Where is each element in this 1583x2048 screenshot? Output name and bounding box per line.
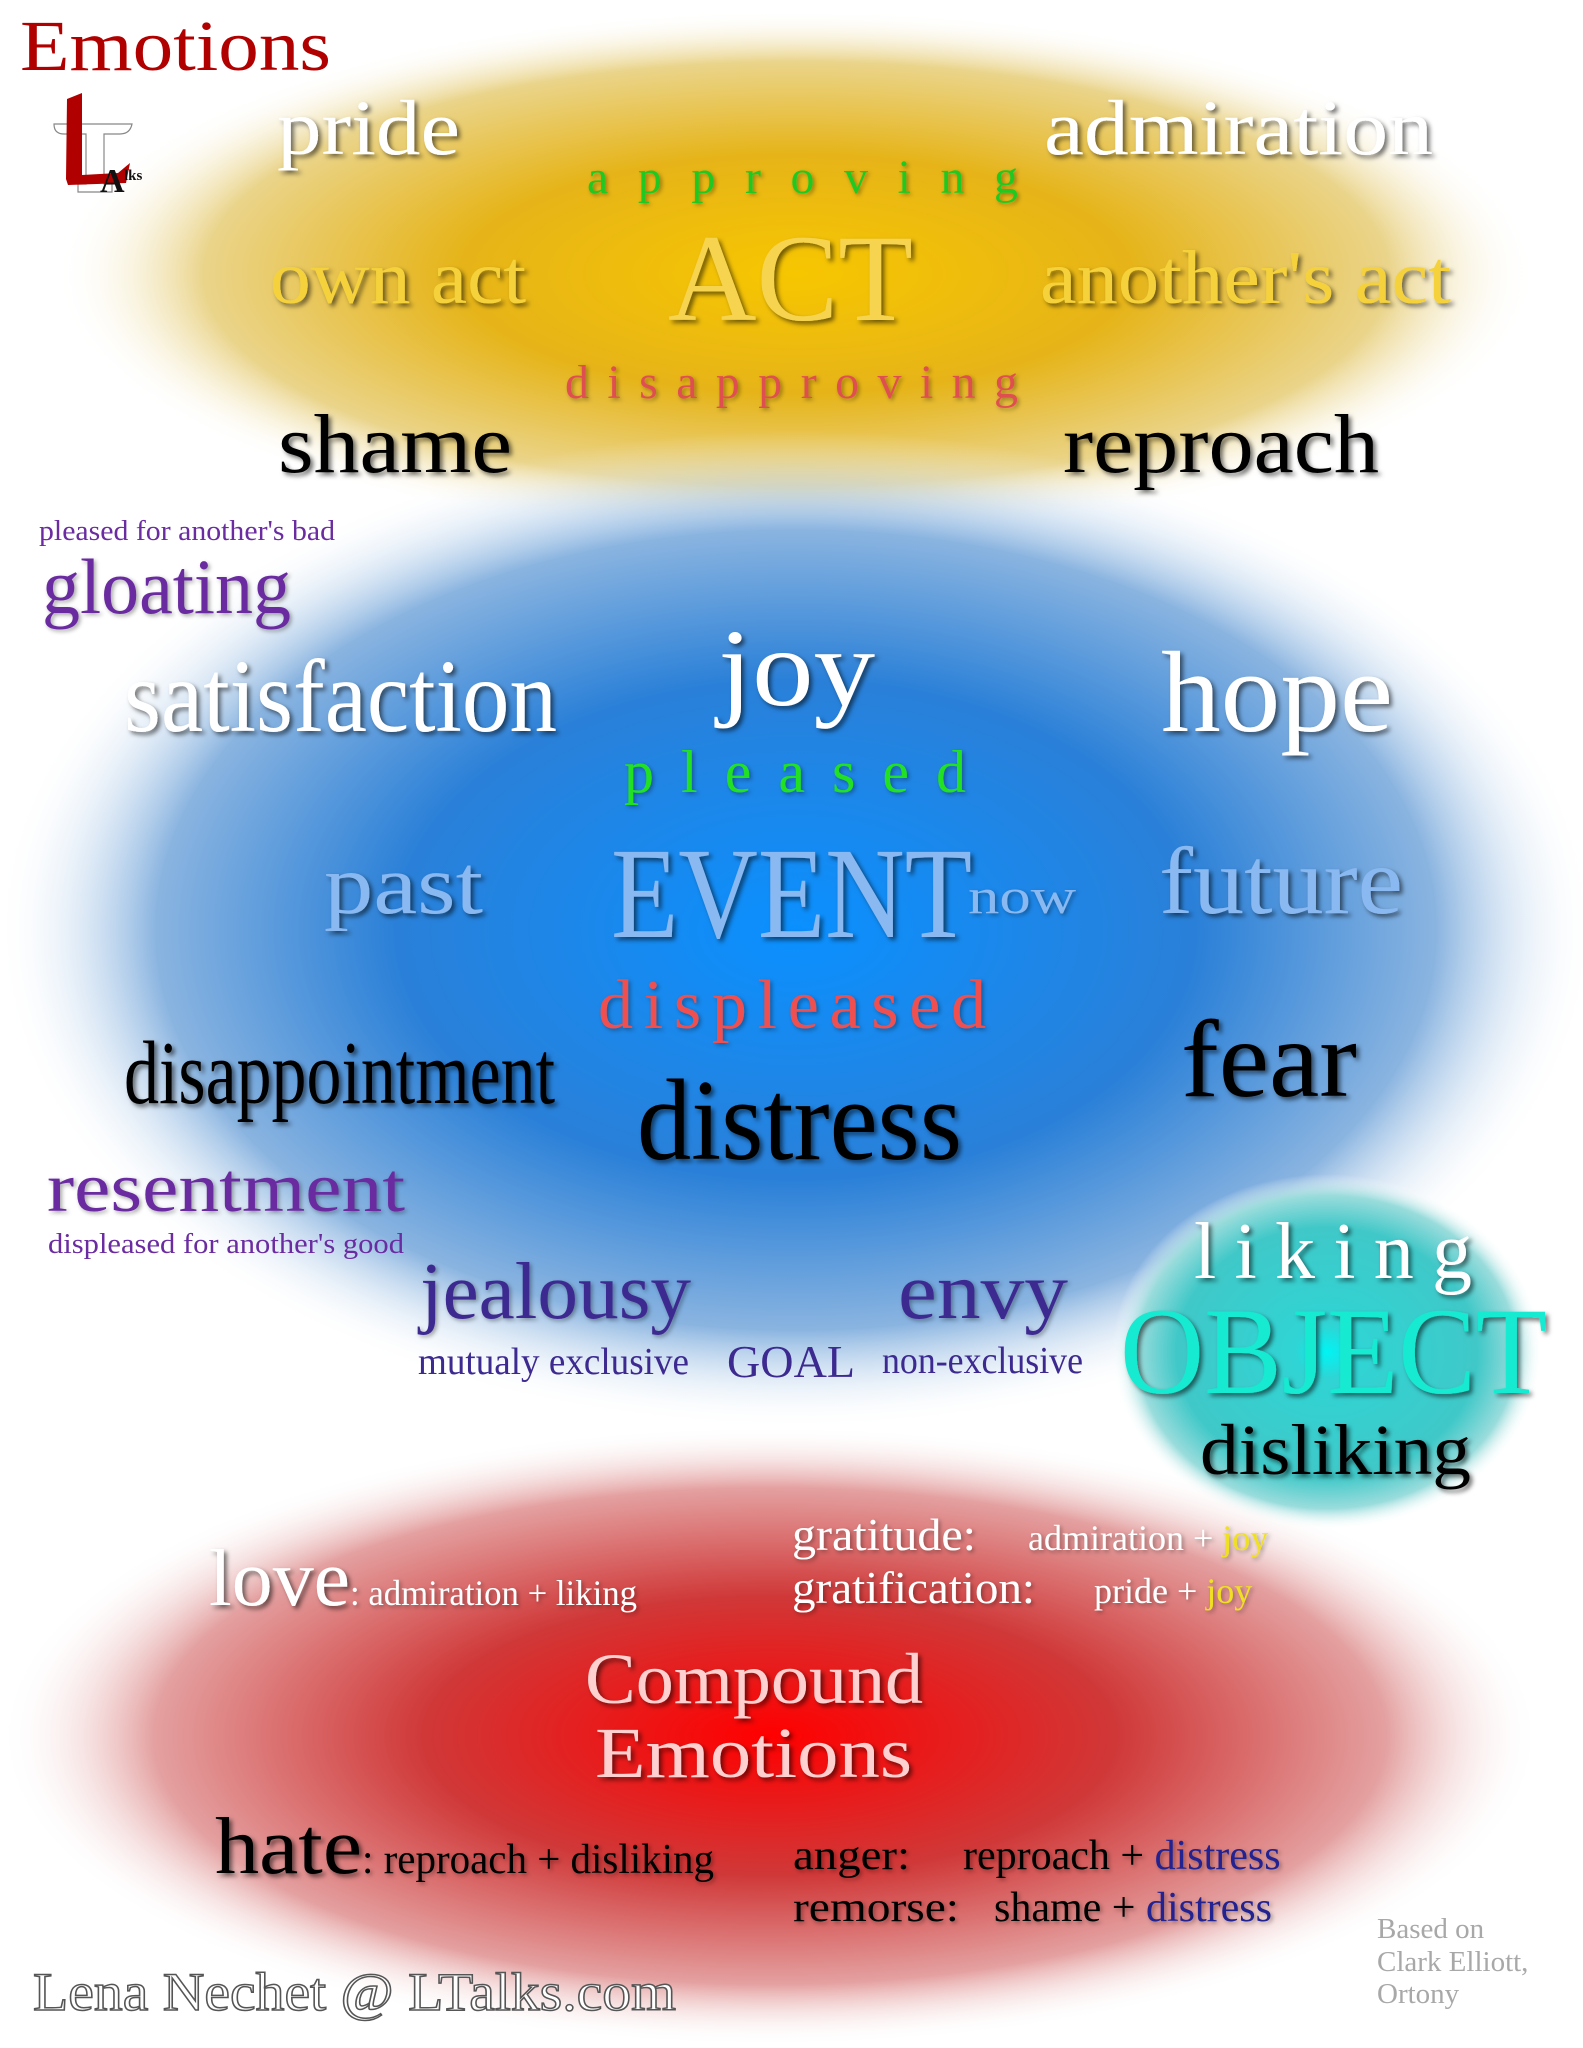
fear: fear <box>1181 998 1357 1120</box>
background: act blob (yellow) <box>56 9 1536 539</box>
credit: source: Clark Elliott, <box>1377 1946 1528 1978</box>
hope: hope <box>1161 629 1393 756</box>
anger definition: reproach + distress <box>963 1833 1281 1879</box>
envy: envy <box>898 1248 1068 1336</box>
mutualy exclusive: mutualy exclusive <box>418 1341 689 1383</box>
anger: anger: <box>793 1833 910 1879</box>
jealousy: jealousy <box>417 1248 691 1336</box>
GOAL: GOAL <box>727 1337 855 1387</box>
joy: joy <box>714 607 875 729</box>
Compound Emotions heading <box>585 1639 923 1793</box>
goal row <box>417 1248 1083 1387</box>
Compound Emotions heading: Compound <box>585 1639 923 1719</box>
act panel text <box>270 84 1451 491</box>
distress: distress <box>637 1057 962 1184</box>
another's act: another's act <box>1040 236 1451 320</box>
title: Emotions <box>20 6 331 86</box>
ACT: ACT <box>668 210 913 347</box>
remorse: remorse: <box>793 1885 959 1931</box>
OBJECT: OBJECT <box>1120 1283 1547 1420</box>
credit: author: Lena Nechet @ LTalks.com <box>33 1962 676 2022</box>
displeased: displeased <box>598 967 986 1044</box>
liking: liking <box>1194 1208 1472 1296</box>
admiration: admiration <box>1044 84 1433 171</box>
background: object blob (teal) <box>1112 1174 1542 1530</box>
credit: source: Based on <box>1377 1913 1485 1945</box>
pride: pride <box>277 84 460 171</box>
icon: LTalks logo: lks <box>124 168 143 184</box>
Compound Emotions heading: Emotions <box>595 1713 912 1793</box>
resentment: resentment <box>47 1150 406 1227</box>
gratitude definition: admiration + joy <box>1028 1518 1268 1558</box>
remorse definition: shame + distress <box>994 1885 1272 1931</box>
credit: source: Ortony <box>1377 1978 1460 2010</box>
reproach: reproach <box>1063 398 1379 491</box>
disappointment: disappointment <box>124 1024 555 1123</box>
background: compound blob (red) <box>0 1426 1540 2046</box>
EVENT: EVENT <box>611 822 972 966</box>
gratification: gratification: <box>792 1563 1035 1613</box>
background: event blob (blue) <box>0 430 1583 1430</box>
love: love <box>209 1535 350 1623</box>
hate definition: : reproach + disliking <box>362 1837 714 1883</box>
shame: shame <box>278 398 512 491</box>
hate: hate <box>215 1803 362 1891</box>
past: past <box>324 838 483 932</box>
object panel text <box>1120 1208 1547 1490</box>
credit: source <box>1377 1913 1528 2010</box>
icon: LTalks logo <box>54 93 143 200</box>
now: now <box>968 868 1076 924</box>
future: future <box>1159 828 1403 934</box>
non-exclusive: non-exclusive <box>882 1340 1083 1382</box>
gratification definition: pride + joy <box>1094 1571 1252 1611</box>
pleased: pleased <box>624 739 966 805</box>
satisfaction: satisfaction <box>124 639 557 754</box>
icon: LTalks logo: A <box>100 163 125 200</box>
pleased for another's bad: pleased for another's bad <box>39 516 335 547</box>
own act: own act <box>270 236 526 320</box>
gratitude: gratitude: <box>792 1510 976 1560</box>
love definition: : admiration + liking <box>350 1573 637 1613</box>
disapproving: disapproving <box>565 356 1018 409</box>
displeased for another's good: displeased for another's good <box>48 1229 404 1260</box>
gloating: gloating <box>42 543 291 630</box>
disliking: disliking <box>1200 1410 1471 1490</box>
event panel text <box>39 516 1403 1260</box>
approving: approving <box>587 151 1018 204</box>
compound panel text <box>209 1510 1281 1931</box>
